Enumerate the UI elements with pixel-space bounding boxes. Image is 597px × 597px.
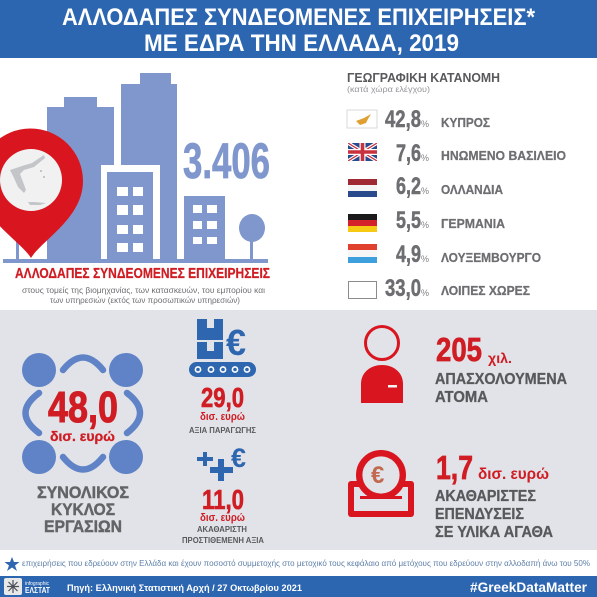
turnover value: 48,0: [48, 383, 118, 432]
icon: asterisk star: [4, 557, 20, 571]
row: Luxembourg: 4,9: [396, 241, 421, 268]
row: Netherlands: ΟΛΛΑΝΔΙΑ: [441, 182, 504, 197]
row: other countries: [348, 275, 530, 302]
heading: foreign affiliated companies: ΑΛΛΟΔΑΠΕΣ ΣΥΝΔΕΟΜΕΝΕΣ ΕΠΙΧΕΙΡΗΣΕΙΣ: [15, 266, 270, 282]
employment figure: ΑΤΟΜΑ: [435, 389, 488, 406]
row: Luxembourg: %: [421, 254, 429, 264]
employment figure: [435, 331, 567, 406]
production value: [189, 382, 256, 435]
icon: conveyor belt with boxes and euro: [189, 319, 256, 377]
investment figure: ΣΕ ΥΛΙΚΑ ΑΓΑΘΑ: [435, 524, 553, 541]
icon: city buildings: [3, 73, 268, 263]
header banner: [0, 0, 597, 58]
turnover label: [37, 483, 129, 536]
title: ΜΕ ΕΔΡΑ ΤΗΝ ΕΛΛΑΔΑ, 2019: [144, 30, 459, 57]
panel: company count illustration: [0, 73, 270, 305]
turnover label: ΕΡΓΑΣΙΩΝ: [44, 517, 122, 536]
logo: ΕΛΣΤΑΤ: [25, 586, 50, 595]
gross value added: δισ. ευρώ: [200, 512, 245, 524]
row: Germany: [348, 207, 506, 234]
investment figure: δισ. ευρώ: [478, 466, 549, 483]
turnover value: δισ. ευρώ: [50, 428, 115, 444]
icon: euro coin in box: [348, 453, 414, 517]
row: Luxembourg: [348, 241, 541, 268]
row: Germany: %: [421, 220, 429, 230]
panel: geographic distribution: [347, 71, 566, 302]
row: United Kingdom: 7,6: [396, 140, 421, 167]
row: Netherlands: 6,2: [396, 173, 421, 200]
heading: geographic distribution: ΓΕΩΓΡΑΦΙΚΗ ΚΑΤΑΝΟΜΗ: [347, 71, 500, 85]
turnover label: ΣΥΝΟΛΙΚΟΣ: [37, 483, 129, 502]
title: ΑΛΛΟΔΑΠΕΣ ΣΥΝΔΕΟΜΕΝΕΣ ΕΠΙΧΕΙΡΗΣΕΙΣ*: [62, 4, 536, 31]
hashtag: #GreekDataMatter: [470, 579, 588, 595]
investment figure: ΕΠΕΝΔΥΣΕΙΣ: [435, 506, 524, 523]
row: Germany: ΓΕΡΜΑΝΙΑ: [441, 216, 506, 231]
row: United Kingdom: ΗΝΩΜΕΝΟ ΒΑΣΙΛΕΙΟ: [441, 148, 566, 163]
row: United Kingdom: [348, 140, 566, 167]
icon: plus signs and euro: [197, 443, 246, 481]
description text: των υπηρεσιών (εκτός των προσωπικών υπηρεσιών): [50, 295, 240, 305]
production value: ΑΞΙΑ ΠΑΡΑΓΩΓΗΣ: [189, 426, 256, 435]
icon: euro coin in box: €: [371, 462, 384, 489]
description text: στους τομείς της βιομηχανίας, των κατασκευών, του εμπορίου και: [22, 285, 265, 295]
row: Cyprus: %: [421, 119, 429, 129]
gross value added: ΑΚΑΘΑΡΙΣΤΗ: [197, 525, 247, 534]
row: Netherlands: [348, 173, 504, 200]
heading: geographic distribution: (κατά χώρα ελέγχου): [347, 85, 430, 94]
turnover label: ΚΥΚΛΟΣ: [51, 500, 115, 519]
description text: [22, 285, 265, 305]
source line: Πηγή: Ελληνική Στατιστική Αρχή / 27 Οκτωβρίου 2021: [67, 583, 303, 594]
icon: employed person: [361, 326, 403, 403]
investment figure: ΑΚΑΘΑΡΙΣΤΕΣ: [435, 488, 536, 505]
investment figure: 1,7: [436, 449, 473, 486]
row: United Kingdom: %: [421, 153, 429, 163]
icon: conveyor belt with boxes and euro: €: [226, 322, 246, 363]
employment figure: χιλ.: [488, 350, 512, 366]
row: Cyprus: [347, 106, 490, 133]
panel: grey key figures: [0, 310, 597, 550]
employment figure: 205: [436, 331, 482, 368]
footnote: [4, 557, 590, 571]
title: [62, 4, 536, 57]
employment figure: ΑΠΑΣΧΟΛΟΥΜΕΝΑ: [435, 371, 567, 388]
turnover value: [48, 383, 118, 444]
row: other countries: %: [421, 288, 429, 298]
count 3.406: 3.406: [183, 133, 270, 189]
production value: 29,0: [201, 382, 244, 413]
icon: map pin with Greece: [0, 129, 83, 258]
row: Germany: 5,5: [396, 207, 421, 234]
gross value added: 11,0: [202, 484, 244, 515]
row: Luxembourg: ΛΟΥΞΕΜΒΟΥΡΓΟ: [441, 250, 541, 265]
gross value added: [182, 484, 264, 545]
investment figure: [435, 449, 553, 541]
logo: [4, 578, 50, 595]
gross value added: ΠΡΟΣΤΙΘΕΜΕΝΗ ΑΞΙΑ: [182, 536, 264, 545]
icon: plus signs and euro: €: [231, 443, 246, 473]
footer bar: [0, 576, 597, 597]
icon: turnover cycle: [22, 353, 143, 474]
row: other countries: ΛΟΙΠΕΣ ΧΩΡΕΣ: [441, 283, 530, 298]
heading: geographic distribution: [347, 71, 500, 94]
logo: infographic: [25, 581, 49, 587]
row: other countries: 33,0: [385, 275, 421, 302]
row: Cyprus: ΚΥΠΡΟΣ: [441, 115, 490, 130]
row: Cyprus: 42,8: [385, 106, 421, 133]
production value: δισ. ευρώ: [200, 411, 245, 423]
row: Netherlands: %: [421, 186, 429, 196]
